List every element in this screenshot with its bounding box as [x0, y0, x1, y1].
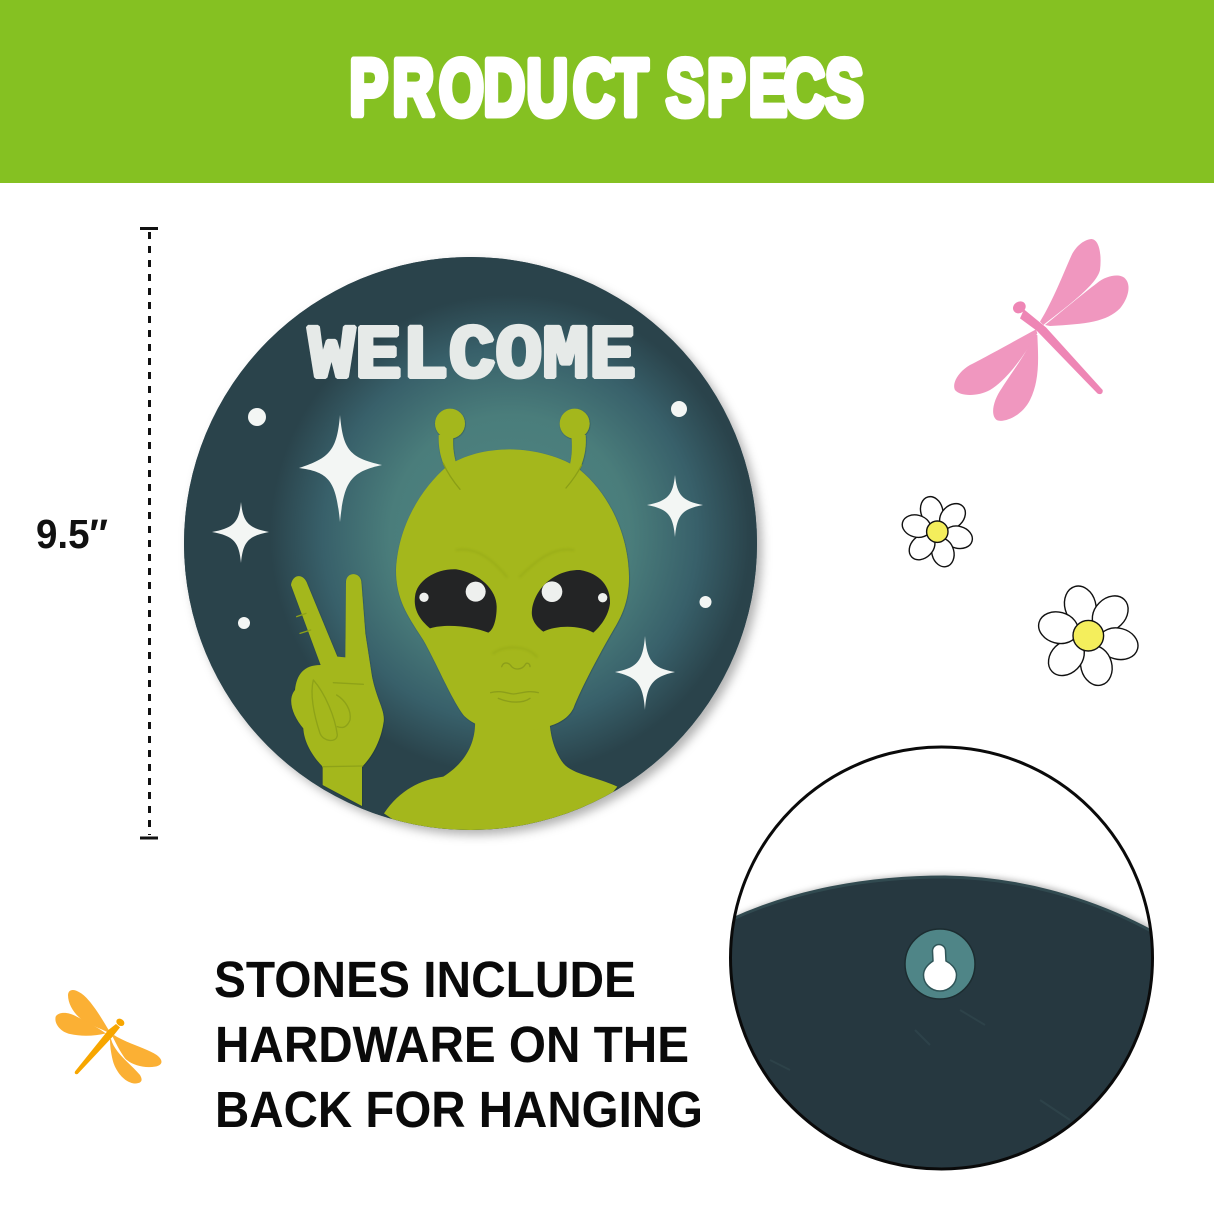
head: [396, 449, 629, 732]
alien figure: [291, 409, 629, 833]
header band: [0, 0, 1214, 183]
back of stone detail circle: [720, 747, 1170, 1180]
pink dragonfly: [954, 239, 1129, 421]
stars and dots: [212, 401, 712, 710]
body: [384, 718, 617, 833]
small daisy: [900, 494, 975, 569]
petals: [1035, 582, 1142, 689]
detail circle outline: [730, 747, 1152, 1169]
alien welcome stone: [184, 257, 757, 833]
petals: [900, 494, 975, 569]
keyhole plate: [905, 929, 975, 999]
body: [75, 1017, 126, 1074]
hand details: [297, 613, 363, 767]
stone lettering: WELCOME: [308, 314, 636, 400]
body: [1011, 299, 1103, 394]
centre: [1073, 620, 1104, 651]
peace sign hand: [291, 574, 384, 806]
face shading: [457, 549, 573, 657]
eyes: [415, 569, 610, 633]
hanging hardware caption: HARDWARE ON THE: [215, 1016, 689, 1073]
stone back surface: [720, 877, 1170, 1180]
nose and mouth: [491, 663, 538, 702]
surface wear: [770, 1010, 1070, 1120]
antenna ridges on forehead: [443, 463, 582, 489]
centre: [927, 521, 948, 542]
wings: [55, 990, 161, 1083]
hanging hardware caption: STONES INCLUDE: [214, 951, 636, 1008]
keyhole slot: [924, 944, 956, 991]
hanging hardware caption: [214, 951, 703, 1138]
eye highlights: [419, 581, 607, 602]
large daisy: [1035, 582, 1142, 689]
orange dragonfly: [55, 990, 161, 1083]
antennae: [435, 409, 590, 489]
wings: [954, 239, 1129, 421]
title: PRODUCT SPECS: [349, 43, 864, 132]
dimension line: [140, 228, 158, 838]
dimension label: 9.5″: [36, 511, 108, 557]
hanging hardware caption: BACK FOR HANGING: [215, 1081, 703, 1138]
